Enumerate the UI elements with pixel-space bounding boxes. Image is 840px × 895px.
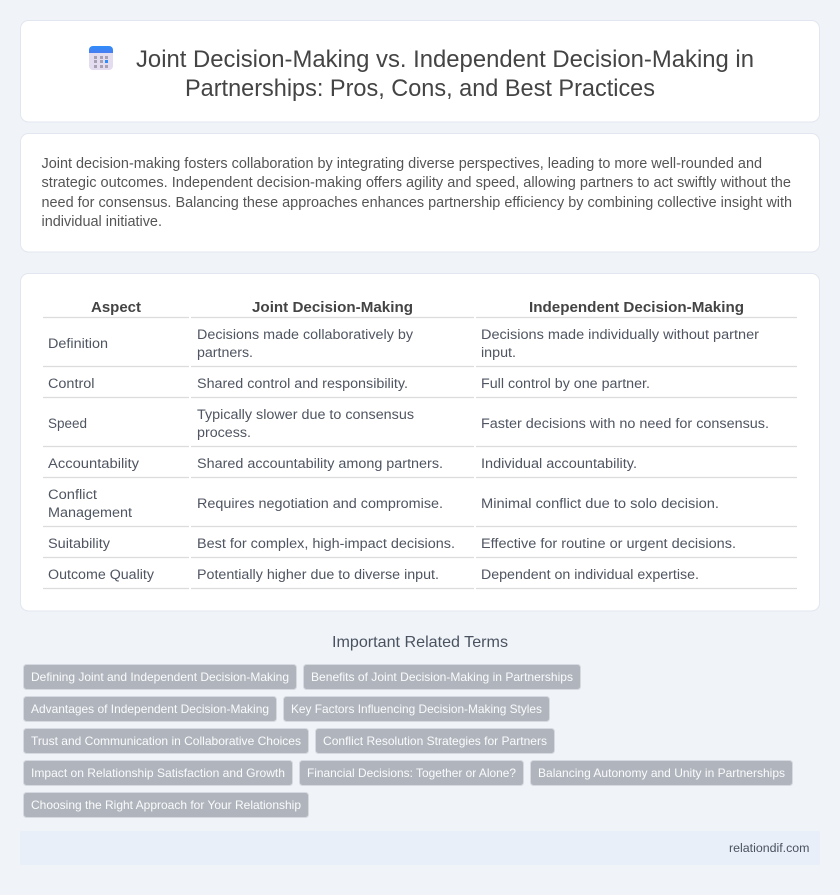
- tag: [24, 792, 308, 818]
- table row: Outcome Quality: [43, 567, 797, 588]
- title: [136, 46, 754, 102]
- tag: Benefits of Joint Decision-Making in Partnerships: [311, 670, 573, 684]
- tag: [316, 728, 554, 754]
- table row: Speed: Faster decisions with no need for consensus.: [481, 416, 769, 432]
- tag: Choosing the Right Approach for Your Relationship: [31, 798, 301, 812]
- panel: comparison table: [20, 274, 820, 611]
- tag: [530, 760, 792, 786]
- title: Partnerships: Pros, Cons, and Best Practices: [185, 75, 655, 102]
- table row: Control: [43, 376, 797, 398]
- tag: [24, 728, 308, 754]
- table row: Suitability: Best for complex, high-impact decisions.: [197, 536, 455, 552]
- table row: Accountability: [43, 456, 797, 478]
- tag: Trust and Communication in Collaborative Choices: [31, 734, 301, 748]
- table row: Definition: Definition: [48, 336, 108, 352]
- tag: [24, 664, 296, 690]
- table row: Definition: partners.: [197, 345, 253, 361]
- tag: [284, 696, 550, 722]
- table header row: Joint Decision-Making: [252, 300, 413, 316]
- tag: Advantages of Independent Decision-Making: [31, 702, 269, 716]
- table row: Speed: process.: [197, 425, 251, 441]
- table row: Accountability: Individual accountability.: [481, 456, 637, 472]
- table row: Outcome Quality: Outcome Quality: [48, 567, 155, 583]
- table row: Suitability: Suitability: [48, 536, 111, 552]
- table header row: [43, 300, 797, 318]
- table row: Accountability: Shared accountability among partners.: [197, 456, 443, 472]
- table row: Conflict Management: Requires negotiation and compromise.: [197, 496, 443, 512]
- table header row: Independent Decision-Making: [529, 300, 744, 316]
- panel: header: [20, 20, 820, 122]
- table row: Speed: Typically slower due to consensus: [197, 407, 414, 423]
- footer: relationdif.com: [729, 841, 810, 855]
- table row: Control: Full control by one partner.: [481, 376, 650, 392]
- table row: Definition: [43, 327, 797, 366]
- table row: Suitability: [43, 536, 797, 558]
- table row: Outcome Quality: Dependent on individual expertise.: [481, 567, 699, 583]
- title: Joint Decision-Making vs. Independent Decision-Making in: [136, 46, 754, 73]
- tag: Balancing Autonomy and Unity in Partnerships: [538, 766, 785, 780]
- table header row: Aspect: [91, 300, 141, 316]
- table row: Conflict Management: Conflict: [48, 487, 97, 503]
- tag: Financial Decisions: Together or Alone?: [307, 766, 516, 780]
- tag: Defining Joint and Independent Decision-Making: [31, 670, 289, 684]
- panel: description: [20, 134, 820, 252]
- icon: calendar: [89, 46, 113, 70]
- tag: Conflict Resolution Strategies for Partners: [323, 734, 547, 748]
- tag: [24, 696, 276, 722]
- table row: Definition: Decisions made collaboratively by: [197, 327, 414, 343]
- tag: [304, 664, 580, 690]
- panel: related term tags: [24, 664, 792, 818]
- footer: [20, 831, 820, 865]
- tag: Impact on Relationship Satisfaction and Growth: [31, 766, 285, 780]
- table row: Speed: Speed: [48, 416, 87, 432]
- tag: [300, 760, 524, 786]
- heading: Important Related Terms: Important Related Terms: [332, 634, 508, 651]
- table row: Control: Shared control and responsibility.: [197, 376, 408, 392]
- text block: description paragraph: individual initiative.: [42, 214, 162, 230]
- table row: Speed: [43, 407, 797, 446]
- table row: Definition: input.: [481, 345, 516, 361]
- table row: Accountability: Accountability: [48, 456, 140, 472]
- text block: description paragraph: need for consensus. Balancing these approaches enhances partnership efficiency by combining collective insight with: [42, 195, 792, 211]
- table row: Conflict Management: [43, 487, 797, 526]
- table row: Outcome Quality: Potentially higher due to diverse input.: [197, 567, 439, 583]
- table row: Conflict Management: Minimal conflict due to solo decision.: [481, 496, 719, 512]
- text block: description paragraph: [42, 156, 792, 230]
- tag: [24, 760, 292, 786]
- table row: Suitability: Effective for routine or urgent decisions.: [481, 536, 736, 552]
- tag: Key Factors Influencing Decision-Making Styles: [291, 702, 542, 716]
- table row: Conflict Management: Management: [48, 505, 132, 521]
- table row: Definition: Decisions made individually without partner: [481, 327, 759, 343]
- text block: description paragraph: strategic outcomes. Independent decision-making offers agility and speed, allowing partners to act swiftly without the: [42, 175, 791, 191]
- table row: Control: Control: [48, 376, 94, 392]
- text block: description paragraph: Joint decision-making fosters collaboration by integrating diverse perspectives, leading to more well-rounded and: [42, 156, 762, 172]
